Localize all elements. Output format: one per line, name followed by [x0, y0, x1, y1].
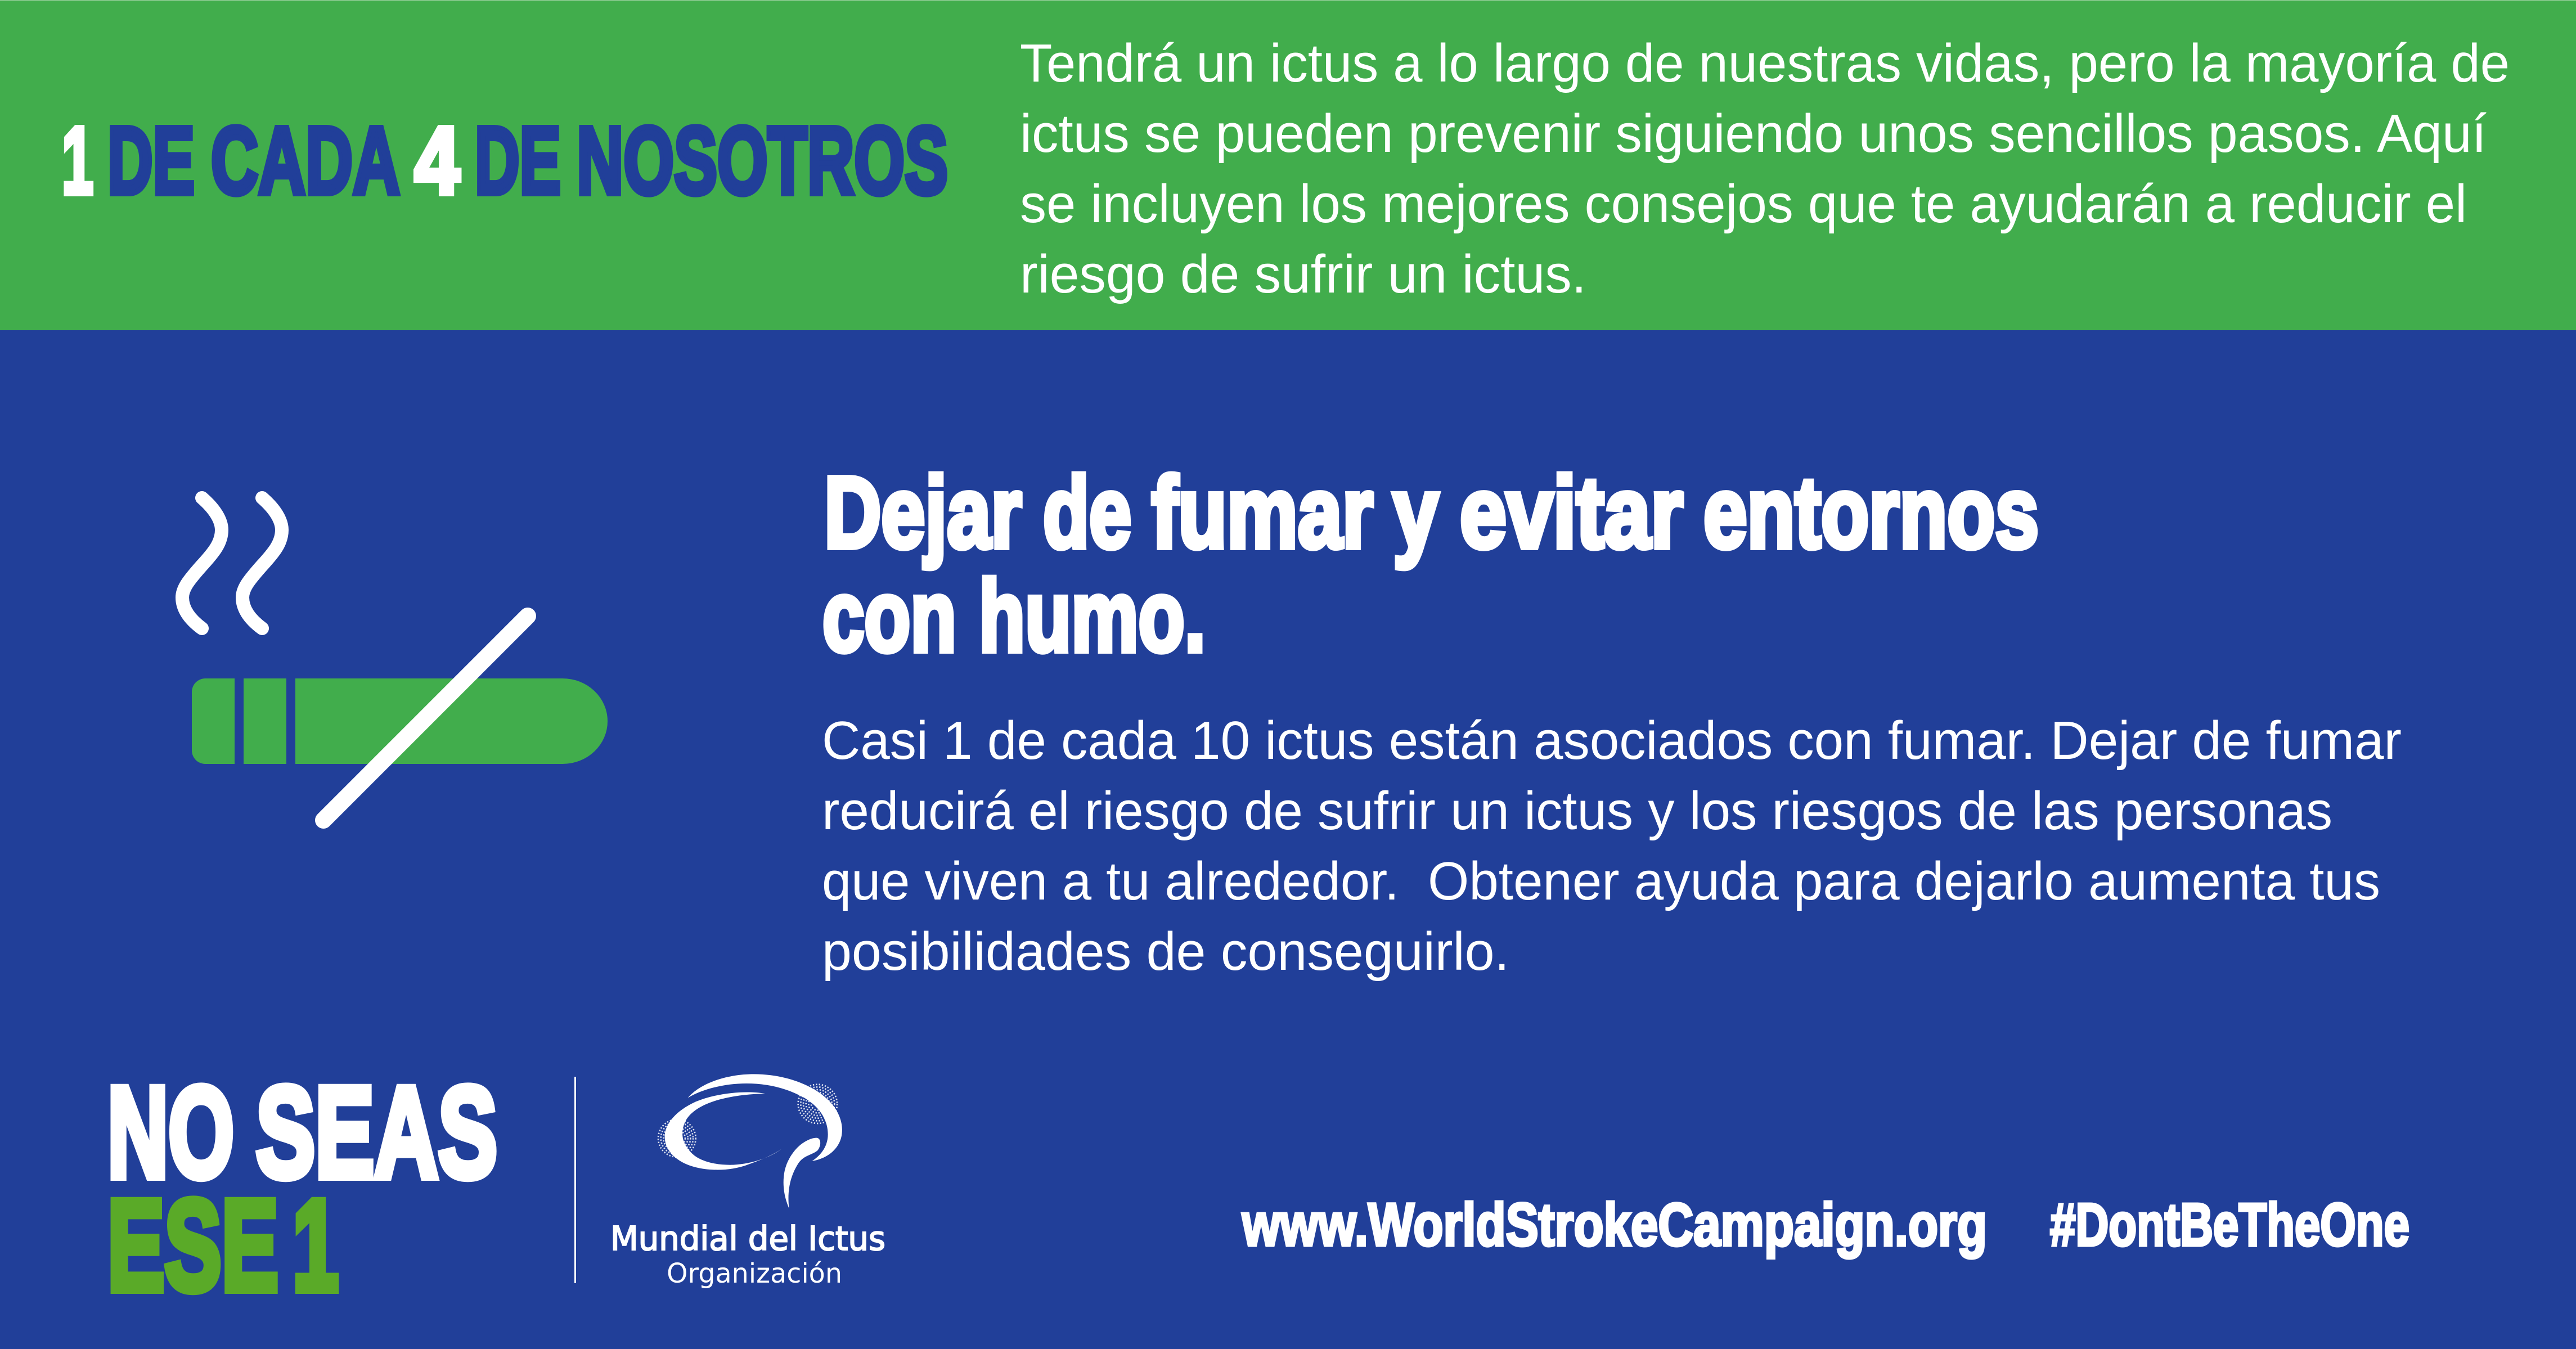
icon part: smoke wisps	[182, 498, 282, 628]
text block: header intro: Tendrá un ictus a lo largo de nuestras vidas, pero la mayoría de	[1020, 33, 2510, 93]
heading: tip title: humo.	[979, 560, 1206, 673]
text block: tip body	[822, 711, 2402, 982]
text block: header intro: ictus se pueden prevenir siguiendo unos sencillos pasos. Aquí	[1020, 104, 2487, 164]
campaign url: www.WorldStrokeCampaign.org	[1242, 1190, 1987, 1258]
text block: tip body: Obtener ayuda para dejarlo aumenta tus	[1428, 851, 2380, 911]
heading: tip title: fumar	[1152, 456, 1373, 569]
campaign slogan: no seas ese 1: 1	[293, 1173, 339, 1317]
logo mark: brain swooshes with halftone dots	[658, 1074, 842, 1208]
heading: tip title: Dejar	[824, 456, 1022, 569]
divider line	[574, 1077, 576, 1283]
heading: tip title	[822, 456, 2039, 673]
icon: crossed-out cigarette with smoke	[182, 498, 608, 820]
text block: header intro	[1020, 33, 2510, 304]
heading: tip title: con	[822, 560, 956, 673]
heading: tip title: entornos	[1703, 456, 2039, 569]
heading: 1 de cada 4 de nosotros: 4	[415, 107, 460, 214]
text block: tip body: reducirá el riesgo de sufrir un ictus y los riesgos de las personas	[822, 781, 2332, 841]
campaign slogan: no seas ese 1	[107, 1060, 497, 1317]
text block: tip body: posibilidades de conseguirlo.	[822, 921, 1509, 982]
heading: tip title: evitar	[1460, 456, 1683, 569]
text block: tip body: que viven a tu alrededor.	[822, 851, 1399, 911]
heading: 1 de cada 4 de nosotros: CADA	[211, 107, 400, 214]
heading: 1 de cada 4 de nosotros: DE	[475, 107, 561, 214]
icon part: cigarette body	[192, 678, 608, 764]
heading: 1 de cada 4 de nosotros: 1	[62, 107, 93, 214]
heading: 1 de cada 4 de nosotros: DE	[107, 107, 195, 214]
logo text: organizacion: Organización	[667, 1258, 842, 1289]
text block: tip body: Casi 1 de cada 10 ictus están asociados con fumar. Dejar de fumar	[822, 711, 2402, 771]
heading: tip title: de	[1043, 456, 1131, 569]
logo text: mundial del ictus: Mundial del Ictus	[610, 1219, 885, 1258]
icon part: strike line	[323, 616, 528, 820]
campaign slogan: no seas ese 1: NO	[107, 1060, 234, 1204]
logo: world stroke organization	[610, 1074, 885, 1289]
heading: tip title: y	[1393, 456, 1438, 569]
campaign hashtag: #DontBeTheOne	[2050, 1190, 2409, 1258]
campaign slogan: no seas ese 1: ESE	[107, 1173, 278, 1317]
text block: header intro: se incluyen los mejores consejos que te ayudarán a reducir el	[1020, 174, 2467, 234]
text block: header intro: riesgo de sufrir un ictus.	[1020, 244, 1586, 304]
heading: 1 de cada 4 de nosotros: NOSOTROS	[577, 107, 948, 214]
campaign slogan: no seas ese 1: SEAS	[256, 1060, 497, 1204]
heading: 1 de cada 4 de nosotros	[62, 107, 948, 214]
panel: green header band	[0, 0, 2576, 330]
